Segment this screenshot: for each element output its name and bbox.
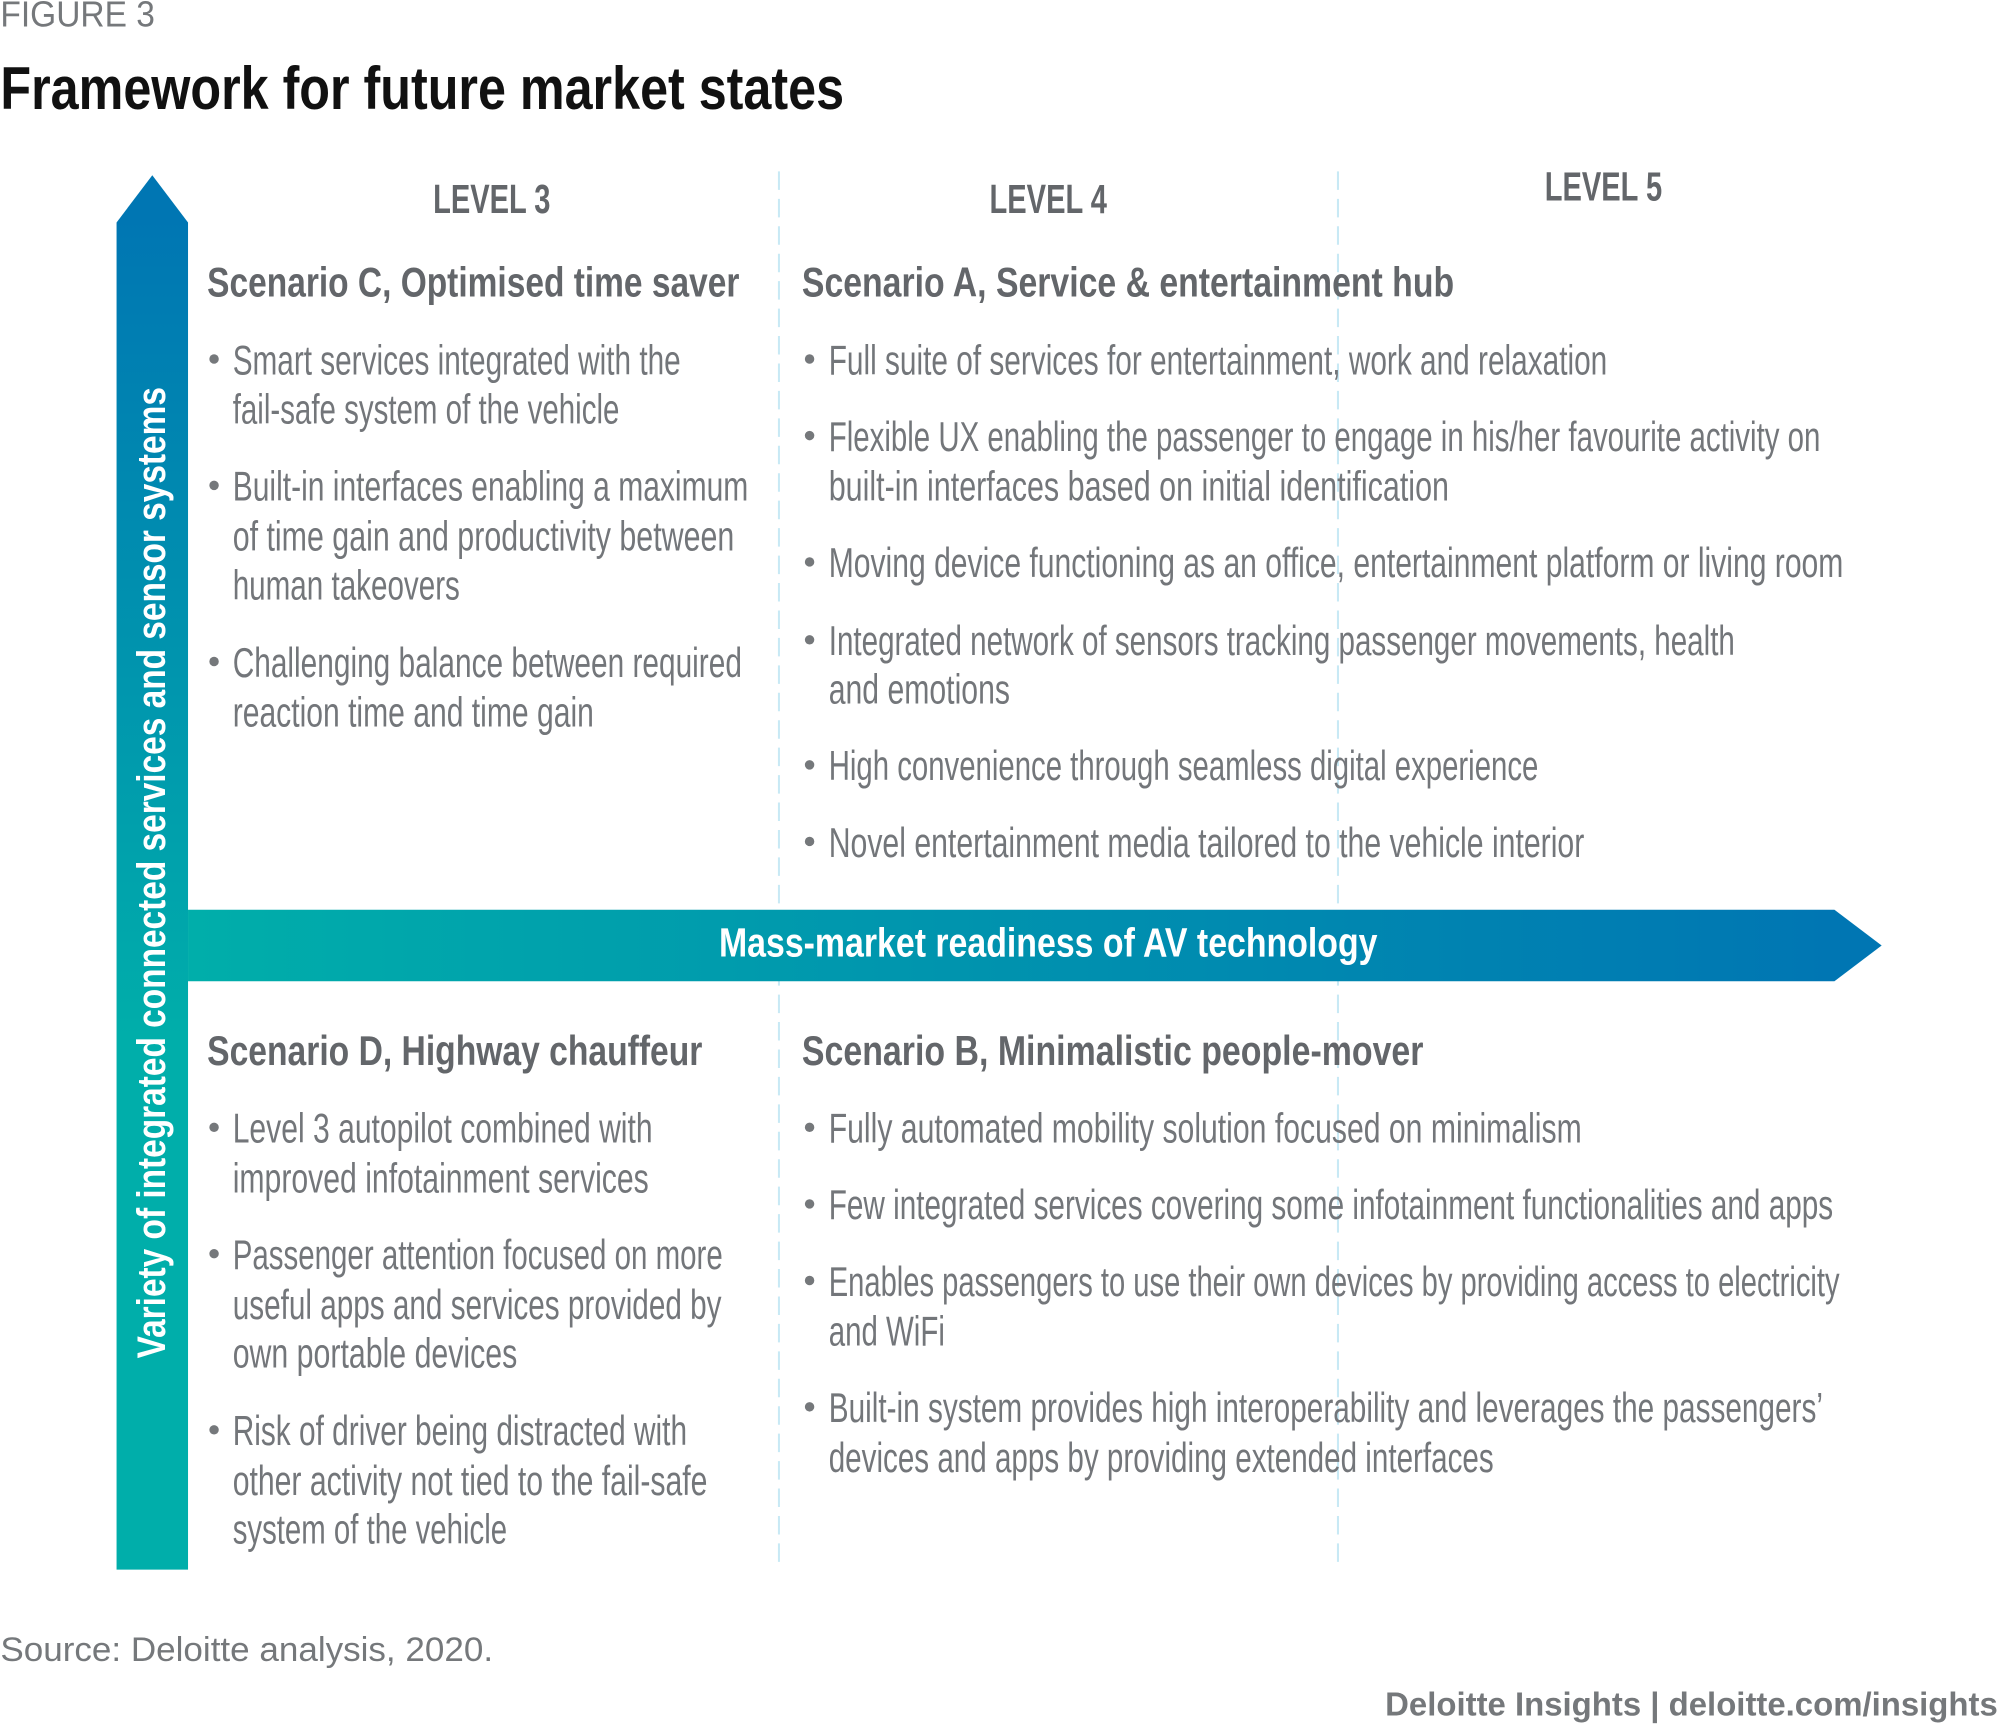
bullet: passenger attention: Passenger attention focused on more [233, 1231, 723, 1278]
level 4 heading: LEVEL 4 [990, 176, 1107, 222]
bullet: fully automated: Fully automated mobility solution focused on minimalism [829, 1105, 1582, 1152]
source note: Source: Deloitte analysis, 2020. [0, 1631, 493, 1669]
bullet: novel media: Novel entertainment media tailored to the vehicle interior [829, 819, 1584, 866]
bullet: built-in interfaces: human takeovers [233, 562, 460, 609]
bullet: flexible UX [805, 413, 1820, 510]
bullet: level 3 autopilot: improved infotainment services [233, 1154, 649, 1201]
bullet: own devices: and WiFi [829, 1308, 945, 1355]
bullet: passenger attention: useful apps and services provided by [233, 1281, 722, 1328]
panel: scenario C [207, 258, 748, 736]
panel: scenario B [802, 1027, 1840, 1481]
bullet: built-in interfaces: Built-in interfaces enabling a maximum [233, 463, 748, 510]
bullet: built-in system: devices and apps by providing extended interfaces [829, 1434, 1494, 1481]
bullet: passenger attention [209, 1231, 723, 1376]
bullet: level 3 autopilot: Level 3 autopilot combined with [233, 1105, 653, 1152]
bullet: own devices [805, 1258, 1840, 1355]
bullet: challenging balance [209, 639, 742, 736]
bullet: built-in interfaces: of time gain and productivity between [233, 512, 734, 559]
bullet: full suite: Full suite of services for entertainment, work and relaxation [829, 336, 1607, 383]
level 3 heading: LEVEL 3 [433, 176, 550, 222]
bullet: passenger attention: own portable devices [233, 1329, 517, 1376]
bullet: smart services [209, 336, 681, 432]
bullet: high convenience: High convenience through seamless digital experience [829, 742, 1538, 789]
bullet: challenging balance: Challenging balance between required [233, 639, 742, 686]
bullet: challenging balance: reaction time and time gain [233, 689, 594, 736]
bullet: integrated network [805, 617, 1735, 713]
bullet: risk of driver [209, 1407, 707, 1552]
heading: scenario A: Scenario A, Service & entertainment hub [802, 258, 1454, 305]
panel: scenario D [207, 1027, 723, 1552]
level 5 heading: LEVEL 5 [1545, 164, 1662, 210]
arrow: vertical axis: Variety of integrated connected services and sensor systems [130, 387, 174, 1358]
bullet: flexible UX: built-in interfaces based on initial identification [829, 463, 1449, 510]
panel: scenario A [802, 258, 1843, 866]
bullet: high convenience [805, 742, 1538, 789]
arrow: horizontal axis: Mass-market readiness of AV technology [719, 919, 1378, 965]
arrow: horizontal axis [188, 910, 1882, 981]
footer credit: Deloitte Insights | deloitte.com/insights [1385, 1687, 1998, 1724]
bullet: risk of driver: other activity not tied to the fail-safe [233, 1457, 707, 1504]
bullet: risk of driver: Risk of driver being distracted with [233, 1407, 687, 1454]
bullet: level 3 autopilot [209, 1105, 653, 1201]
heading: scenario C: Scenario C, Optimised time saver [207, 258, 739, 305]
heading: scenario B: Scenario B, Minimalistic people-mover [802, 1027, 1423, 1074]
bullet: smart services: fail-safe system of the vehicle [233, 385, 619, 432]
heading: scenario D: Scenario D, Highway chauffeur [207, 1027, 702, 1074]
bullet: smart services: Smart services integrated with the [233, 336, 681, 383]
bullet: built-in interfaces [209, 463, 748, 609]
arrow: vertical axis [117, 175, 188, 1570]
bullet: built-in system [805, 1384, 1823, 1481]
bullet: risk of driver: system of the vehicle [233, 1505, 507, 1552]
title: Framework for future market states [0, 55, 844, 122]
bullet: integrated network: and emotions [829, 666, 1010, 713]
